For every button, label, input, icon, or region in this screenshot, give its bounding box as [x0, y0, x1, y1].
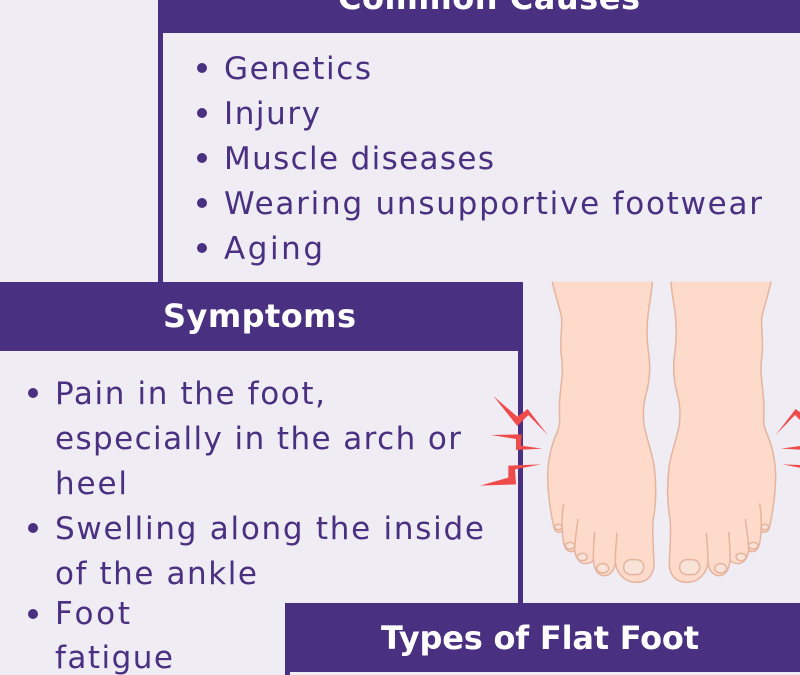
- list: causes: Aging: [224, 231, 323, 267]
- list: causes: Wearing unsupportive footwear: [224, 186, 762, 222]
- illustration: feet with pain marks: [480, 282, 800, 582]
- list: causes: [197, 51, 762, 267]
- list: symptoms: heel: [55, 466, 127, 502]
- panel: common causes: [158, 0, 800, 283]
- list: symptoms: fatigue: [55, 640, 173, 675]
- list: symptoms: Foot: [55, 596, 130, 632]
- list: symptoms: Swelling along the inside: [55, 511, 484, 547]
- list: causes: Muscle diseases: [224, 141, 494, 177]
- panel: symptoms: [0, 282, 523, 675]
- heading: symptoms: Symptoms: [163, 297, 356, 335]
- list: symptoms: of the ankle: [55, 556, 257, 592]
- list: causes: Genetics: [224, 51, 371, 87]
- list: symptoms: [28, 376, 484, 675]
- panel: types of flat foot: [285, 603, 800, 675]
- list: symptoms: Pain in the foot,: [55, 376, 325, 412]
- heading: types of flat foot: Types of Flat Foot: [381, 619, 699, 657]
- list: causes: Injury: [224, 96, 320, 132]
- list: symptoms: especially in the arch or: [55, 421, 461, 457]
